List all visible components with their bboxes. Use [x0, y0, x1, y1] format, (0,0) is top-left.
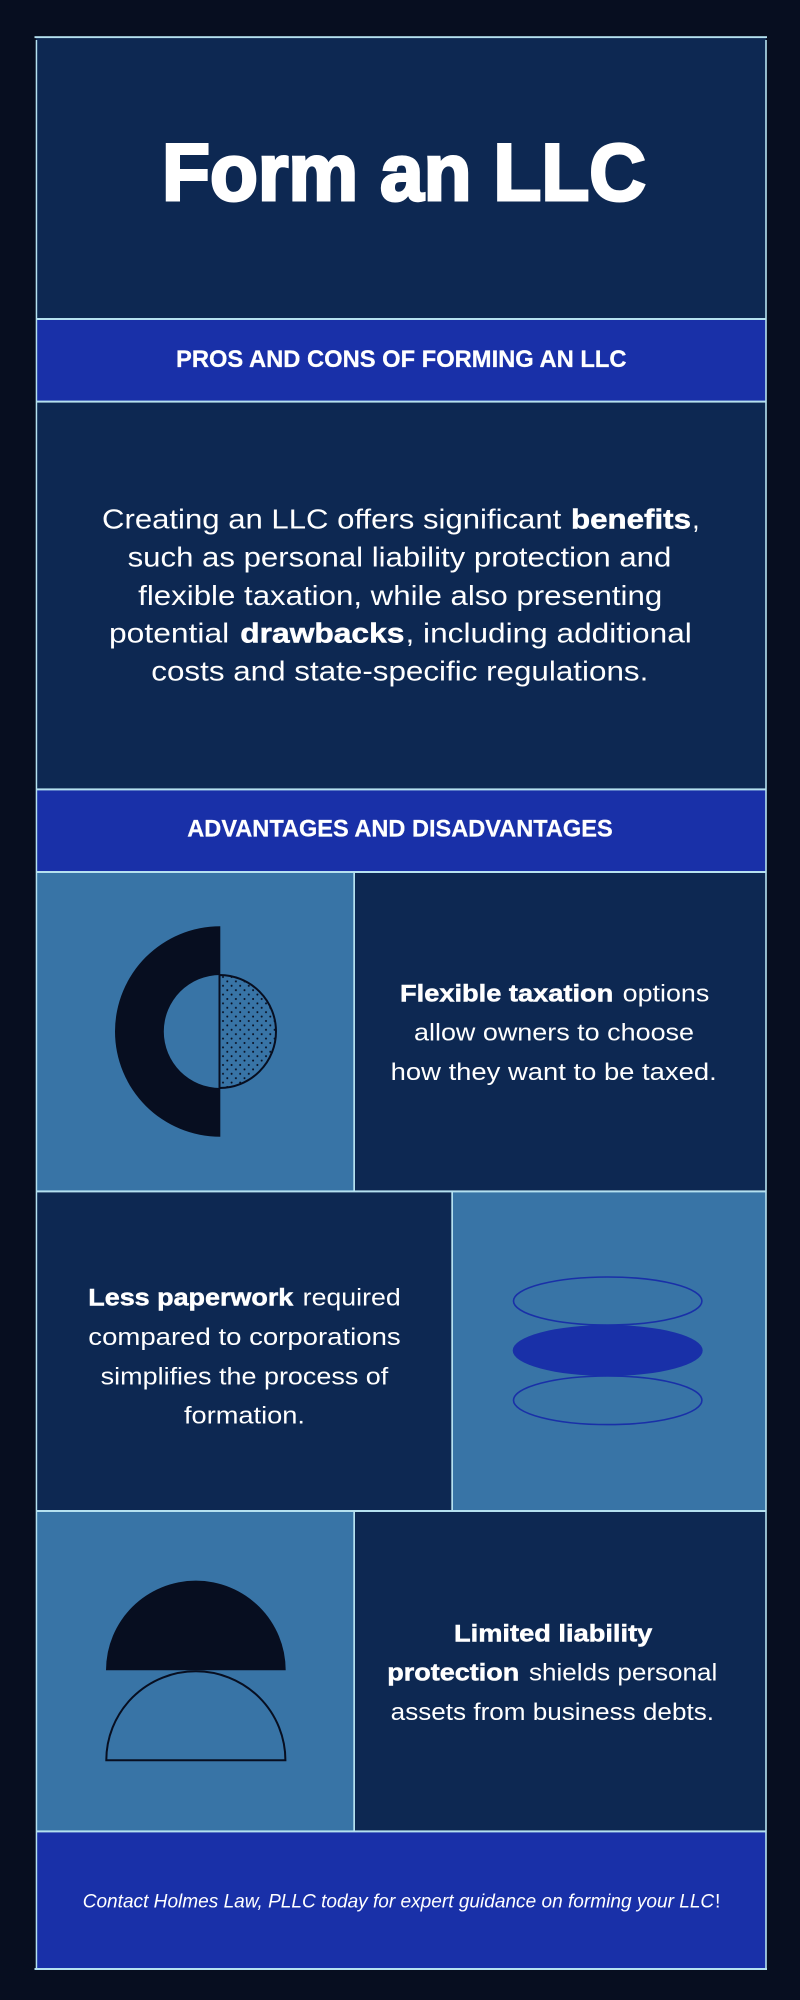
text block: introduction: , [692, 503, 700, 534]
heading: advantages and disadvantages: ADVANTAGES AND DISADVANTAGES [187, 816, 613, 843]
text block: less paperwork: required [303, 1285, 401, 1312]
text block: flexible taxation: Flexible taxation [400, 981, 613, 1008]
panel: less paperwork row [36, 1191, 766, 1511]
panel: advantages band [36, 789, 766, 872]
heading: pros and cons: PROS AND CONS OF FORMING AN LLC [176, 346, 626, 373]
text block: introduction: , including additional [406, 618, 692, 648]
text block: limited liability: Limited liability [454, 1621, 653, 1648]
text block: limited liability: assets from business debts. [391, 1699, 714, 1726]
text block: less paperwork: simplifies the process of [101, 1363, 389, 1390]
text block: flexible taxation: options [623, 981, 709, 1008]
icon: half ring and dotted half circle [115, 926, 276, 1137]
text block: flexible taxation: allow owners to choose [414, 1020, 694, 1047]
text block: less paperwork [88, 1285, 401, 1429]
text block: introduction: costs and state-specific regulations. [151, 656, 648, 687]
text block: introduction [102, 503, 700, 687]
panel: limited liability row [36, 1511, 766, 1831]
text block: limited liability [387, 1621, 717, 1726]
text block: flexible taxation [391, 981, 717, 1086]
text: call to action: Contact Holmes Law, PLLC today for expert guidance on forming your LLC [83, 1890, 715, 1912]
text block: introduction: flexible taxation, while also presenting [138, 580, 662, 611]
title: Form an LLC [162, 128, 646, 218]
text block: flexible taxation: how they want to be taxed. [391, 1059, 717, 1086]
panel: footer call to action [36, 1831, 766, 1969]
text block: introduction: such as personal liability protection and [128, 542, 671, 573]
text: call to action: ! [715, 1890, 720, 1912]
icon: stacked half circles [106, 1581, 286, 1760]
text block: introduction: benefits [571, 503, 691, 534]
text block: limited liability: shields personal [529, 1660, 717, 1687]
text block: less paperwork: Less paperwork [88, 1285, 294, 1312]
text block: less paperwork: formation. [184, 1402, 305, 1429]
panel: introduction [36, 401, 766, 789]
text block: limited liability: protection [387, 1660, 519, 1687]
panel: subtitle band [36, 319, 766, 401]
panel: flexible taxation row [36, 872, 766, 1191]
text block: introduction: potential [109, 618, 229, 648]
text block: introduction: Creating an LLC offers significant [102, 503, 562, 534]
icon: stacked ellipses [513, 1277, 703, 1425]
text block: less paperwork: compared to corporations [88, 1324, 401, 1351]
text block: introduction: drawbacks [240, 618, 404, 648]
panel: title [36, 37, 766, 319]
